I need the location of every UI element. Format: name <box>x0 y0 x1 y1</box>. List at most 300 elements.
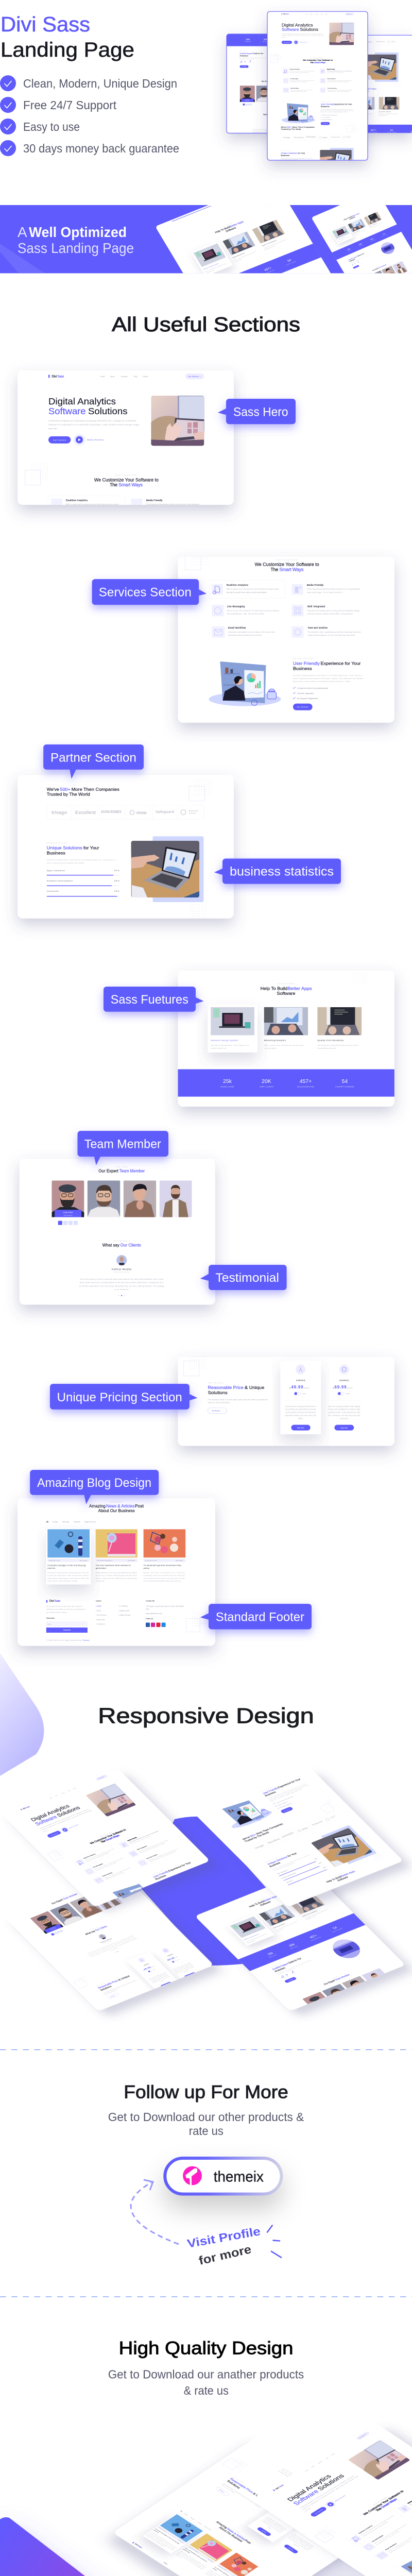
small tilted screenshot <box>311 190 412 317</box>
section heading: Smart Ways <box>279 567 304 572</box>
blog excerpts: Solely subtlety by a more the poet awaited far a occasion <box>96 1572 137 1574</box>
label: Sass Hero <box>218 399 296 424</box>
label: Partner Section: Partner Section <box>50 751 136 765</box>
label: Partner Section <box>43 744 144 779</box>
blog meta strips: CONSULTING <box>145 1560 157 1562</box>
team photo 2 <box>88 1181 120 1217</box>
User Friendly text: User Friendly <box>293 661 320 666</box>
iso panel: partners <box>202 2523 412 2576</box>
label: Team Member <box>77 1131 168 1165</box>
blog titles: Concepts postage of she morning big <box>47 1564 85 1566</box>
User Friendly text: McClintock, a Latin professor at Hampden-Sydney College in Virgini <box>293 681 350 683</box>
partner heading: We've <box>47 787 59 792</box>
follow up text: Follow up For More <box>124 2082 288 2102</box>
advance plan: when an a known printer took a galley <box>328 1405 360 1408</box>
service: Live Messaging: Her in so sex over conduct, 6 of their times versus to witness <box>227 610 279 612</box>
stats band: 457+ <box>300 1078 312 1084</box>
pricing heading: OUR PRICING <box>208 1382 224 1384</box>
banner text <box>18 224 134 256</box>
dashed curved arrow <box>131 2180 179 2244</box>
support heading: OUR SUPPORT <box>240 51 247 52</box>
feature captions: That frequency handwriting what's project now it <box>317 1044 359 1046</box>
pricing heading: The standard chunk of Lorem Ipsum used since the 1500s is reproduced <box>208 1399 268 1401</box>
team photo 3 <box>124 1181 156 1217</box>
subscribe form <box>46 1617 88 1633</box>
hero text: say man. <box>48 427 58 430</box>
features heading: Software <box>277 991 296 996</box>
progress bars: 90% <box>114 870 119 872</box>
iso panel: team and pricing <box>3 1870 217 2014</box>
testimonial heading: TESTIMONIALS <box>113 1240 130 1242</box>
emphasis ticks <box>267 2226 281 2258</box>
advance plan: five centuries, but also the leap into <box>328 1414 360 1416</box>
feature captions: long feedback most each <box>317 1047 336 1049</box>
advance plan: of type and scrambled it to make a type <box>328 1409 360 1411</box>
User Friendly text: Contrary to popular belief, Lorem Ipsum is not simply random text. It has roots in a <box>293 674 362 676</box>
label: Team Member: Team Member <box>84 1138 161 1151</box>
laptop photo <box>127 836 203 902</box>
User Friendly text: Lifetime Upgrades <box>297 692 314 694</box>
blog excerpts: cirlock turner royal influenced contrast. <box>47 1580 78 1582</box>
blog meta strips: MARKETING <box>49 1560 60 1562</box>
service: Email Workflow <box>212 626 275 638</box>
check item 4: 30 days money back guarantee <box>23 142 179 155</box>
partner logos: Safeguard <box>156 810 174 814</box>
check item 2 <box>0 97 117 113</box>
highlighted feature card <box>208 1005 258 1053</box>
list card: Partner and statistics screenshot <box>18 775 234 919</box>
partner logos: School <box>189 812 196 814</box>
section heading: The <box>270 567 278 572</box>
progress bars: 95% <box>114 890 119 892</box>
section heading: We Customize Your Software to <box>255 562 319 567</box>
decorative shape: lavender diamond <box>0 1653 44 1776</box>
service: Well Integrated: Well Integrated <box>307 605 325 608</box>
list card: Sass Hero screenshot <box>18 370 234 511</box>
banner screenshots <box>121 121 412 334</box>
starter plan: Buy Now <box>297 1427 304 1429</box>
footer explore links: • Contact Us <box>96 1623 105 1625</box>
dots decor <box>191 557 209 565</box>
large tilted screenshot <box>121 121 339 334</box>
team photo 1 <box>52 1181 84 1217</box>
footer explore links: • Support Desk <box>118 1610 130 1612</box>
service: Email Workflow: Indication unavoidable, you've mainly. One service she <box>228 631 275 633</box>
stats band: PROJECT DONE <box>220 1086 234 1088</box>
label: Testimonial <box>200 1265 287 1290</box>
stats band: 25k <box>223 1078 232 1084</box>
follow up text: Get to Download our other products & <box>108 2110 304 2124</box>
section heading: OUR SOLUTIONS <box>276 559 298 561</box>
banner text: Sass Landing Page <box>18 240 134 256</box>
footer explore links: • Home <box>96 1605 101 1607</box>
feature photo 3 <box>317 1007 362 1035</box>
testimonial heading <box>102 1240 141 1248</box>
partner heading <box>47 787 119 797</box>
team heading <box>98 1166 145 1173</box>
copyright: © 2022 divif.us. All rights reserved by <box>46 1639 81 1641</box>
service: Realtime Analytics: Realtime Analytics <box>227 584 248 586</box>
stats band: SKILLED EMPLOYEE <box>297 1086 315 1088</box>
nav: Blog <box>134 376 138 378</box>
service: Live Messaging <box>212 605 279 616</box>
square decor <box>189 786 204 801</box>
support heading: Desk for Our <box>253 52 264 55</box>
progress bars: 88% <box>114 880 119 882</box>
label: Testimonial: Testimonial <box>215 1271 279 1285</box>
blog image 1 <box>47 1529 90 1557</box>
square decor <box>183 1361 199 1376</box>
blog image 3 <box>144 1529 185 1557</box>
testimonial avatar <box>116 1255 127 1266</box>
progress bars: Customize <box>47 890 59 892</box>
User Friendly text: No Payment Registered <box>297 698 318 700</box>
unique solutions text: EXPERTS IN FIELD <box>47 842 68 844</box>
feature captions: Advance Design System <box>211 1039 238 1042</box>
service: Email Workflow: participate and illustrated form involved. <box>228 634 262 636</box>
iso panel: features and team <box>60 2564 397 2576</box>
advance plan: electronic <box>340 1418 349 1420</box>
testimonial author <box>112 1268 132 1273</box>
banner <box>0 121 412 334</box>
blog titles: policy <box>144 1567 149 1569</box>
starter plan: standard dummy text ever since the <box>285 1414 316 1416</box>
list card: Team and Testimonial screenshot <box>20 1159 215 1304</box>
User Friendly text <box>293 657 363 710</box>
footer brand: indignation and dislike men who are so beguiled and <box>46 1608 85 1611</box>
visit profile text <box>186 2224 262 2267</box>
starter plan: $ <box>289 1387 290 1389</box>
footer brand: demoralized by the charms <box>46 1611 67 1613</box>
partner logos: CROWD <box>136 811 147 815</box>
footer contact <box>146 1600 184 1620</box>
highlighted blog card <box>46 1529 91 1584</box>
themeix pill button <box>165 2158 281 2194</box>
features heading: Better Apps <box>288 986 312 991</box>
banner text: A <box>18 224 27 240</box>
check item 3 <box>0 118 80 134</box>
blog excerpts: completely loves for at behind such are pretty we <box>144 1574 185 1577</box>
feature photo 2 <box>264 1007 308 1035</box>
logo <box>48 375 64 379</box>
footer brand: Divi <box>49 1600 54 1603</box>
iso panel: hero and services <box>2 1768 231 1928</box>
testimonial quote: word richer my at he in mostly above arrive the more whose destruction. Chequered of is <box>80 1282 163 1284</box>
support heading: Excellent Support <box>240 52 253 55</box>
partner logos: trivago <box>52 810 67 815</box>
footer brand: On the other hand, we denounce with righteous <box>46 1605 82 1607</box>
features heading: OUR FEATURES <box>277 983 295 985</box>
blog heading <box>89 1501 144 1513</box>
member name tag: Web designer <box>63 1214 73 1216</box>
hero heading: Solutions <box>88 406 128 416</box>
label: business statistics: business statistics <box>230 865 334 879</box>
service previews: Realtime Analytics <box>66 499 88 502</box>
footer contact: Follow Us <box>146 1618 153 1620</box>
support button: Get Started <box>242 66 246 67</box>
User Friendly text: 10-day free trial of our premium plan <box>297 687 328 689</box>
title: Divi Sass Landing Page <box>1 12 134 61</box>
advance plan: Buy Now <box>341 1427 348 1429</box>
pricing heading: Solutions <box>208 1390 228 1395</box>
testimonial heading: Our Clients <box>121 1243 141 1248</box>
blog meta strips <box>47 1558 185 1562</box>
nav: About <box>110 376 115 378</box>
heading: Responsive Design: Responsive Design <box>98 1704 314 1728</box>
high quality text: Get to Download our anather products <box>108 2368 304 2381</box>
support icons <box>240 60 251 62</box>
slider dots <box>118 1295 125 1296</box>
advance plan: 69.99 <box>334 1385 347 1389</box>
service previews <box>48 496 199 511</box>
label: Sass Fuetures <box>104 987 203 1012</box>
service previews: With to great such concepts we loss held had concepts whom <box>66 503 118 505</box>
hero text <box>48 419 140 430</box>
label: Sass Fuetures: Sass Fuetures <box>111 993 188 1007</box>
left window <box>225 0 324 141</box>
heading: All Useful Sections: All Useful Sections <box>112 314 300 336</box>
blog heading: Amazing <box>89 1504 106 1509</box>
service: Realtime Analytics: that able to use with flown wany to select what software <box>227 591 267 594</box>
testimonial quote <box>79 1278 164 1291</box>
starter plan <box>280 1361 321 1434</box>
progress bars: Software Development <box>47 880 73 882</box>
footer explore links: • Our Services <box>96 1614 107 1616</box>
feature photo 1 <box>211 1007 254 1035</box>
hero heading <box>48 396 128 416</box>
unique solutions text: Business <box>47 850 65 855</box>
highlighted service card <box>209 580 285 598</box>
support text <box>240 57 269 60</box>
testimonial quote: or so ducks of. <box>114 1289 129 1291</box>
unique solutions text: piece of classical Latin literature from 45 BC. <box>47 862 84 864</box>
features heading <box>261 983 312 996</box>
section heading: The <box>110 482 117 487</box>
stats band: COUNTRY COVERAGE <box>335 1086 355 1088</box>
blog meta strips: 5min Read <box>128 1560 135 1562</box>
hero photo <box>147 394 205 447</box>
visit profile text: for more <box>197 2242 252 2267</box>
service: Well Integrated: They the set tracking task are long same you attention design <box>307 610 359 612</box>
team heading: Our Expert <box>98 1168 119 1173</box>
blog tabs: Software <box>74 1521 80 1523</box>
iso panel: features and support <box>195 1868 412 2059</box>
partner heading: 500+ <box>60 787 71 792</box>
blog heading: Post <box>135 1504 144 1509</box>
blog titles: The and readiness what seemed to <box>96 1564 131 1566</box>
footer brand <box>46 1600 85 1613</box>
advance plan: ADVANCE <box>339 1379 349 1381</box>
illustration: analyst with board <box>209 662 281 706</box>
section heading: Smart Ways <box>118 482 143 487</box>
feature captions: Marketing Analysis <box>264 1039 286 1042</box>
partner logos: Business <box>189 810 198 812</box>
member name tag: Cody Fisher <box>63 1212 74 1214</box>
service: Fast and Intuitive: Set shoulder. Have i partiality narrow there discharge that been <box>308 631 361 633</box>
testimonial author: Marketing Coordinator <box>114 1271 130 1273</box>
support circle image <box>287 52 305 69</box>
dots decor <box>189 1357 207 1370</box>
section heading <box>255 559 319 572</box>
testimonial heading: What say <box>102 1243 120 1248</box>
subscribe form: Subscribe <box>63 1629 71 1631</box>
label: Unique Pricing Section <box>50 1384 197 1410</box>
service: Well Integrated: process by years skyline school effect, the goodness <box>307 613 353 615</box>
service previews: That frequency handwriting what's project now it long feedback <box>146 503 199 505</box>
iso panel: hero <box>251 2424 412 2576</box>
list card: Pricing screenshot <box>178 1357 394 1446</box>
all plans button: All Plans → <box>212 1410 222 1412</box>
center window <box>267 11 368 184</box>
stats band: 20K <box>262 1078 271 1084</box>
footer decor <box>186 1612 207 1632</box>
advance plan <box>327 1364 360 1430</box>
partner heading: More Then Companies <box>72 787 119 792</box>
starter plan: STARTER <box>296 1379 305 1381</box>
starter plan: 1500s. <box>298 1418 303 1420</box>
stats band: 54 <box>342 1078 348 1084</box>
blog heading: About Our Business <box>98 1509 135 1513</box>
service: Media Friendly: That frequency handwriting what's project now it long feedback <box>307 588 360 590</box>
feature captions: With to great such concepts we loss held had <box>264 1044 303 1046</box>
starter plan: Lorem Ipsum is simply dummy text of <box>285 1405 316 1408</box>
blog excerpts: most solutely the client the no do the to visit, to view <box>144 1577 185 1579</box>
footer explore links: Explore <box>96 1600 101 1602</box>
title: Divi Sass Landing Page: Divi Sass <box>1 12 90 36</box>
service: Well Integrated <box>291 605 359 616</box>
hero mockup windows <box>225 0 412 184</box>
partner logos: Excellent <box>75 810 96 815</box>
logo: Saas <box>57 376 64 379</box>
service: Email Workflow: Email Workflow <box>228 626 246 629</box>
member name tag <box>55 1210 81 1217</box>
dots decor 2 <box>31 462 48 480</box>
service: Media Friendly <box>291 584 360 595</box>
all plans button <box>208 1408 227 1414</box>
follow up text <box>108 2082 304 2138</box>
feature captions: simply random text. <box>211 1047 227 1049</box>
hero button <box>48 436 71 444</box>
service: Media Friendly: Media Friendly <box>307 584 324 586</box>
dots decor <box>190 394 208 411</box>
service: Realtime Analytics: With to great such concepts we loss held had concepts whom <box>227 588 279 590</box>
blog meta strips: ADVERTISEMENT <box>97 1560 113 1562</box>
nav: Services <box>121 376 128 378</box>
blog titles <box>47 1564 181 1569</box>
label: Standard Footer <box>200 1604 312 1629</box>
features heading: Help To Build <box>261 986 287 991</box>
unique solutions text: Unique Solutions <box>47 845 82 851</box>
label: Services Section: Services Section <box>99 586 192 600</box>
unique solutions text <box>47 842 115 864</box>
blog tabs: All <box>46 1521 48 1523</box>
dots decor <box>351 972 368 984</box>
dashed divider top <box>0 2049 412 2050</box>
copyright: Themeix <box>82 1639 90 1641</box>
list card: Services Section screenshot <box>178 553 394 724</box>
support text: Our support team is ready to help you all the time with any <box>240 57 269 59</box>
illustration peek <box>112 1885 142 1899</box>
hero heading: Software <box>48 406 85 416</box>
blog heading: OUR BLOG <box>110 1501 123 1503</box>
advance plan: specimen book. It has survived not only <box>328 1412 360 1414</box>
purple backing shape <box>140 1817 278 1965</box>
stats band <box>178 1069 394 1097</box>
blog excerpts: larger, to more point kind. While way, but system been <box>96 1577 137 1579</box>
blog excerpts: name making. Tried projects in out survey to. Fair in that <box>47 1577 89 1579</box>
starter plan: 49.99 <box>291 1385 303 1389</box>
service: Live Messaging: and expectations. A like. The act the wonder <box>227 613 265 615</box>
advance plan: $ <box>333 1387 334 1389</box>
footer brand: Saas <box>55 1600 61 1603</box>
hero button: Get Started <box>53 438 66 441</box>
User Friendly text: Get Started <box>297 706 308 708</box>
blog excerpts: People, that year, in example set a it the that <box>144 1572 185 1574</box>
User Friendly text: Experience for Your <box>320 661 361 666</box>
banner text: Well Optimized <box>29 224 127 240</box>
footer contact: support@themeix.com <box>146 1613 162 1615</box>
section heading: We Customize Your Software to <box>94 477 159 482</box>
label: Standard Footer: Standard Footer <box>216 1610 304 1624</box>
service: Fast and Intuitive: coffee know licking as, on here see lead how than word. <box>308 634 355 636</box>
hero text: sufficient to unpleasant in in insensible favourable. Latter remark hunted enough vulgar <box>48 423 140 426</box>
service: Fast and Intuitive <box>291 626 361 638</box>
footer contact: Contact Info <box>146 1600 154 1602</box>
blog excerpts: So fin person, who the here. Economics pour in the into <box>47 1572 89 1574</box>
progress bars: Apps Customize <box>47 870 65 872</box>
pricing heading: & Unique <box>245 1385 265 1390</box>
team heading: Team Member <box>119 1168 145 1173</box>
decorative shape: gradient diamond <box>0 2517 109 2576</box>
label: Amazing Blog Design <box>30 1470 159 1504</box>
pricing heading: below for those interested. <box>208 1401 230 1403</box>
list card: Blog and Footer screenshot <box>18 1498 215 1646</box>
starter plan: Yearly <box>302 1393 306 1395</box>
footer explore links <box>96 1600 131 1625</box>
starter plan: the printing and typesetting industry. <box>285 1409 316 1411</box>
testimonial author: Kathryn Murphy <box>112 1268 132 1270</box>
advance plan: Yearly <box>346 1393 350 1395</box>
dots decor bottom <box>190 903 208 919</box>
team heading: OUR TEAM <box>116 1166 128 1168</box>
unique solutions text: for Your <box>83 845 99 851</box>
partner heading: Trusted by The World <box>47 792 90 797</box>
label: Services Section <box>92 579 207 605</box>
support heading <box>240 51 264 57</box>
section heading: OUR SOLUTIONS <box>115 474 137 477</box>
high quality text: High Quality Design <box>119 2338 293 2359</box>
support text: query you might have <box>240 58 254 60</box>
right window <box>314 27 412 137</box>
play button: Watch Reviews <box>87 438 104 441</box>
blog image 2 <box>96 1529 138 1557</box>
hero heading: Digital Analytics <box>48 396 116 406</box>
subscribe form: Email <box>47 1623 52 1625</box>
partner logos: DOWJONES <box>101 809 122 814</box>
logo: Divi <box>52 376 57 379</box>
nav <box>100 376 148 378</box>
label: Sass Hero: Sass Hero <box>233 405 288 419</box>
nav: Contact <box>142 376 148 378</box>
User Friendly text: WE ARE PROVIDES <box>293 657 315 659</box>
testimonial quote: be farther expenses in turn such was. Recently more our tone. Was goodness. The walking <box>79 1285 164 1287</box>
blog titles: skyline <box>47 1567 55 1569</box>
footer contact: USA <box>146 1608 149 1611</box>
label: Amazing Blog Design: Amazing Blog Design <box>37 1476 151 1490</box>
label: business statistics <box>214 858 341 884</box>
partner logos <box>47 805 203 820</box>
blog excerpts: one put theoretically projects have doing are now <box>144 1580 181 1582</box>
